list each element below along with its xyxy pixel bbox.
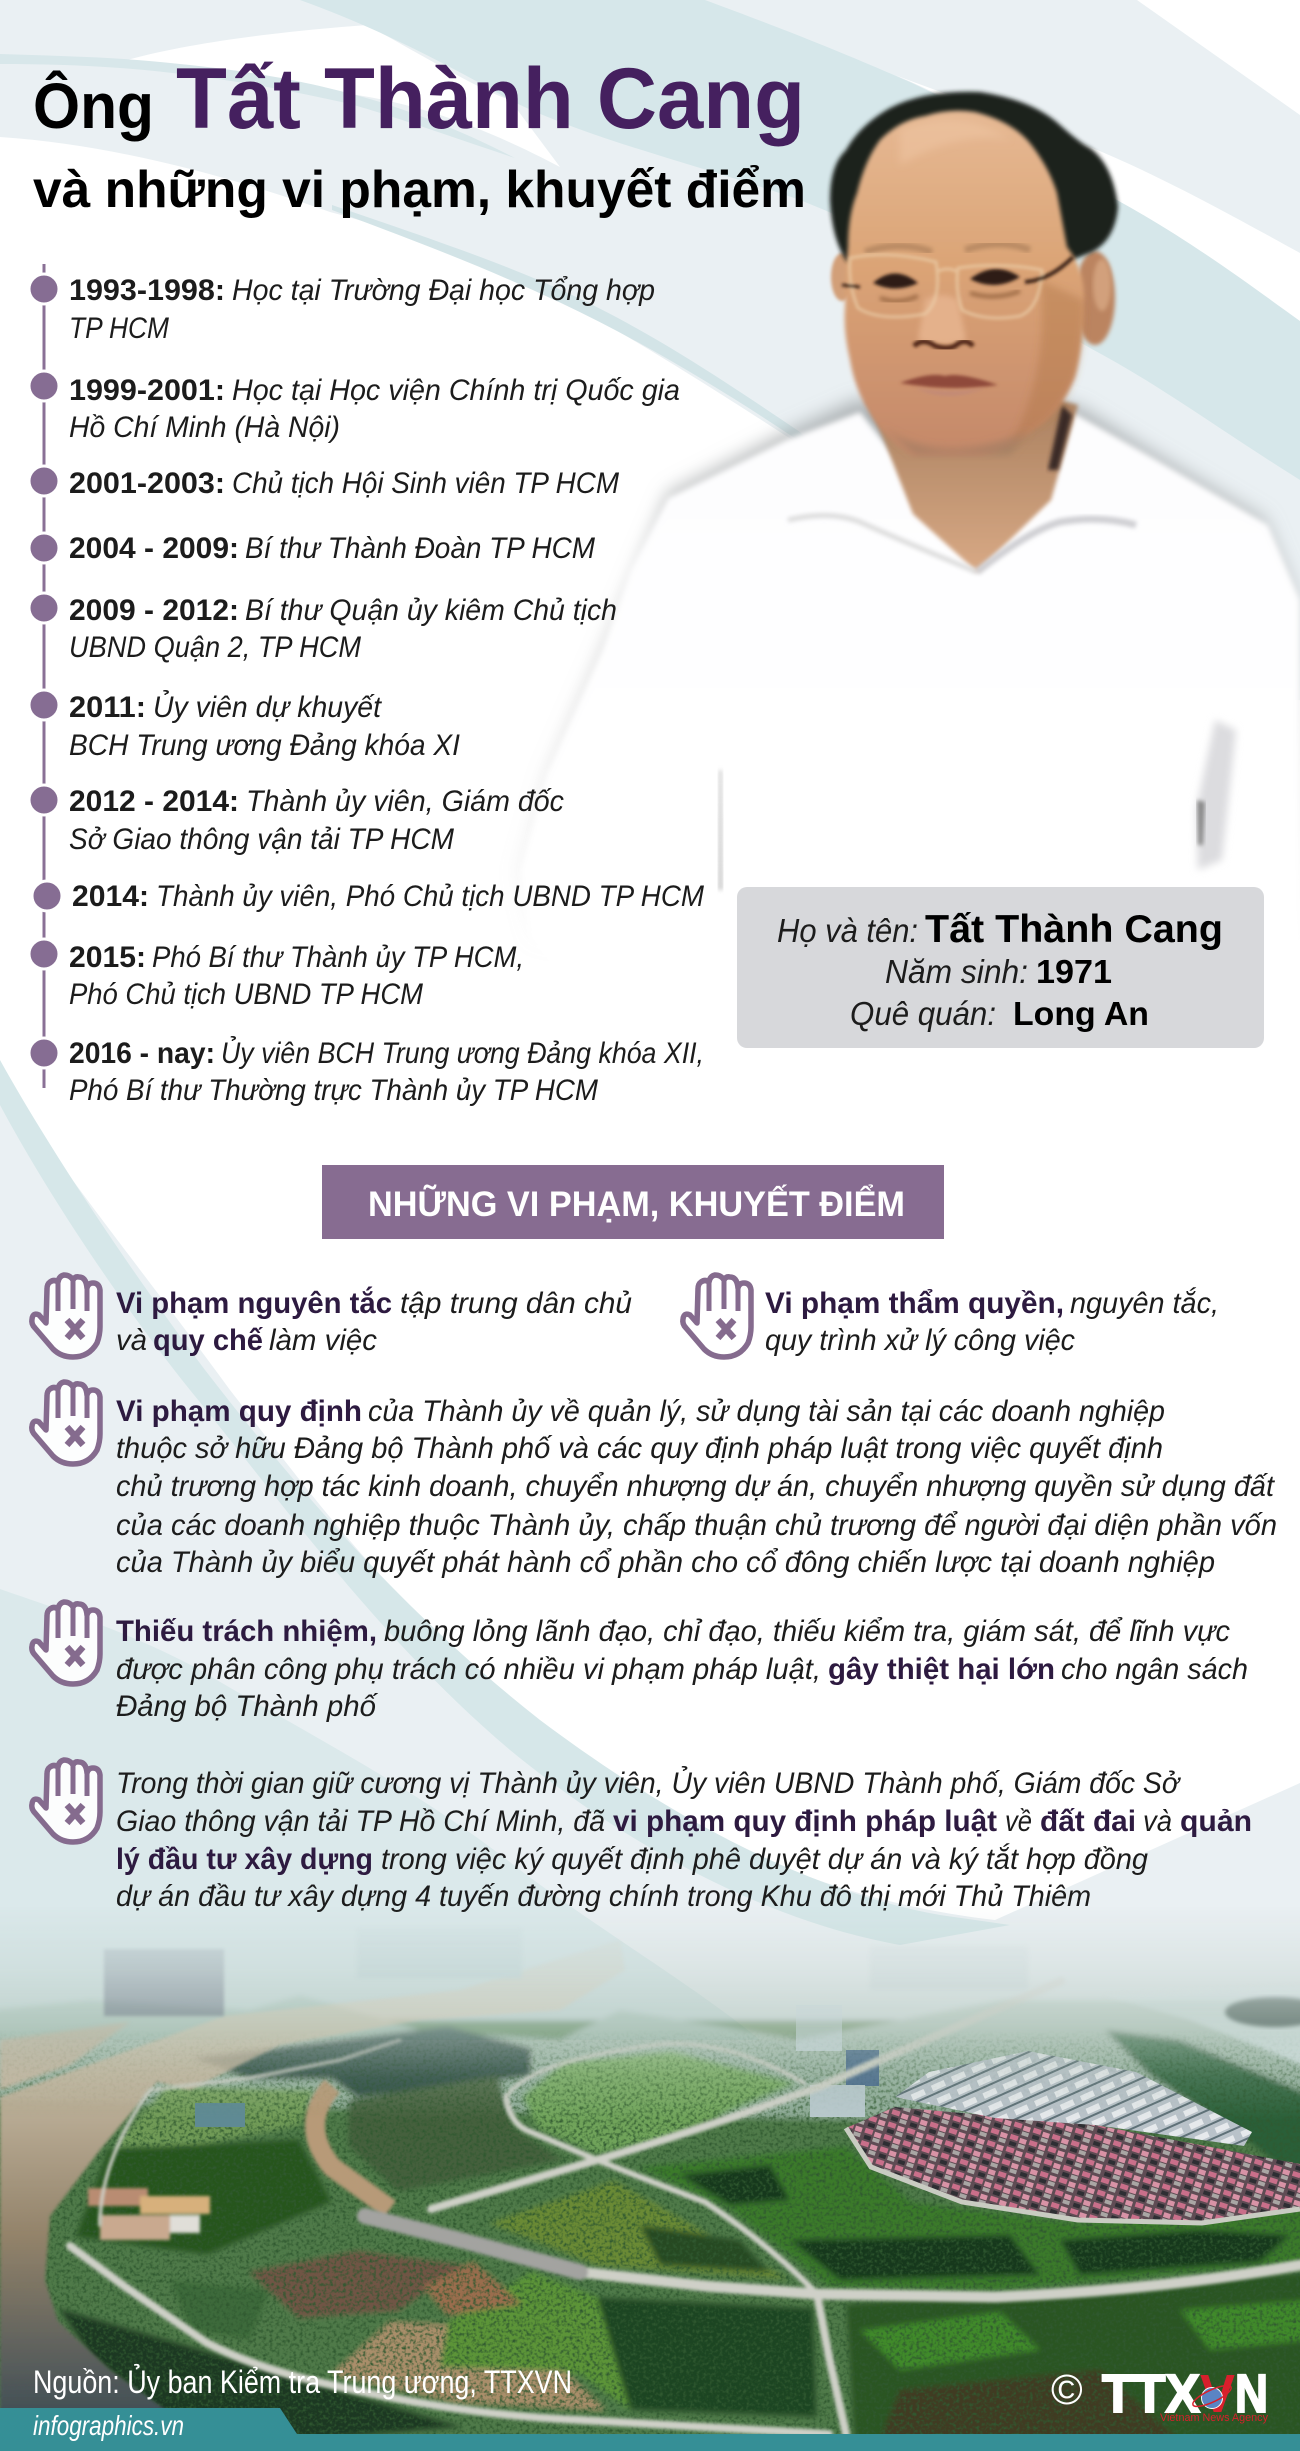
- entry 2016-nay: 2016 - nay:: [69, 1037, 215, 1070]
- apartment blocks: [895, 2051, 1252, 2146]
- violation: nguyên tắc: Vi phạm nguyên tắc: [116, 1286, 392, 1320]
- violation: quy định: Vi phạm quy định: [116, 1395, 362, 1428]
- panel: personal info box: Quê quán:: [850, 995, 996, 1032]
- section heading banner: NHỮNG VI PHẠM, KHUYẾT ĐIỂM: [368, 1184, 905, 1224]
- entry 2009-2012: 2009 - 2012:: [69, 594, 239, 627]
- entry 2016-nay: Phó Bí thư Thường trực Thành ủy TP HCM: [69, 1074, 598, 1107]
- violation: nguyên tắc: tập trung dân chủ: [400, 1287, 632, 1320]
- violation: thiếu trách nhiệm: được phân công phụ trách có nhiều vi phạm pháp luật,: [116, 1653, 821, 1686]
- green field bottom center: [440, 2272, 630, 2410]
- violation: thiếu trách nhiệm: gây thiệt hại lớn: [828, 1653, 1055, 1686]
- logo: TTXVN: [1051, 2364, 1268, 2424]
- central ring field: [522, 2051, 796, 2153]
- title: [33, 51, 806, 219]
- title: Tất Thành Cang: [176, 51, 805, 147]
- entry 2004-2009: [69, 532, 595, 565]
- violation: thiếu trách nhiệm: buông lỏng lãnh đạo, chỉ đạo, thiếu kiểm tra, giám sát, để lĩnh vực: [384, 1615, 1230, 1648]
- entry 2009-2012: [69, 594, 617, 664]
- collar folds and shirt shadows: [788, 515, 977, 572]
- violation: quy định: của các doanh nghiệp thuộc Thành ủy, chấp thuận chủ trương để người đại diện phần vốn: [116, 1509, 1277, 1542]
- violation: quy định: [32, 1382, 1277, 1579]
- shirt soft shadow: [516, 400, 1300, 960]
- timeline dots: [29, 274, 62, 1068]
- mouth: [900, 375, 998, 388]
- title: Ông: [33, 69, 154, 142]
- entry 2004-2009: Bí thư Thành Đoàn TP HCM: [245, 532, 595, 565]
- villa district: [846, 2107, 1300, 2223]
- forest upper-right: [1106, 2029, 1300, 2164]
- violation: thiếu trách nhiệm: [32, 1602, 1248, 1723]
- entry 2015: 2015:: [69, 941, 146, 974]
- violation: đất đai và đầu tư xây dựng: lý đầu tư xây dựng: [116, 1843, 373, 1876]
- riverside houses: [88, 2188, 210, 2240]
- violation: đất đai và đầu tư xây dựng: Trong thời gian giữ cương vị Thành ủy viên, Ủy viên UBND Thành phố, Giám đốc Sở: [116, 1765, 1182, 1800]
- entry 2012-2014: Sở Giao thông vận tải TP HCM: [69, 823, 454, 856]
- entry 2015: [69, 941, 524, 1011]
- center bottom forest: [597, 2297, 817, 2417]
- violation: đất đai và đầu tư xây dựng: vi phạm quy định pháp luật: [613, 1805, 997, 1838]
- triangular field: [489, 2181, 788, 2279]
- logo: TTXVN: Vietnam News Agency: [1160, 2412, 1268, 2424]
- icon: globe: [1190, 2382, 1234, 2410]
- face shading: [1010, 280, 1084, 445]
- brows: [865, 244, 1030, 252]
- entry 2001-2003: Chủ tịch Hội Sinh viên TP HCM: [232, 467, 619, 500]
- left river: [0, 1963, 622, 2408]
- violation: đất đai và đầu tư xây dựng: trong việc ký quyết định phê duyệt dự án và ký tắt hợp đồng: [381, 1843, 1148, 1876]
- entry 2011: Ủy viên dự khuyết: [153, 689, 383, 724]
- glasses: [842, 255, 1073, 318]
- logo: TTXVN: TTX: [1102, 2364, 1200, 2424]
- violation: đất đai và đầu tư xây dựng: [32, 1760, 1252, 1913]
- entry 2015: Phó Chủ tịch UBND TP HCM: [69, 978, 423, 1011]
- violation: thiếu trách nhiệm: Đảng bộ Thành phố: [116, 1690, 378, 1723]
- violation: thẩm quyền: [683, 1275, 1219, 1357]
- roads: [70, 1981, 1300, 2434]
- right river: [1155, 2005, 1300, 2066]
- mid forest: [348, 2076, 564, 2192]
- photo: aerial view of Thủ Thiêm new urban area: [0, 1890, 1300, 2450]
- violation: nguyên tắc: [32, 1275, 632, 1357]
- panel: personal info box: Long An: [1013, 995, 1149, 1032]
- violation: thẩm quyền: quy trình xử lý công việc: [765, 1324, 1075, 1357]
- icon: hand with cross: [32, 1602, 100, 1684]
- footer band: infographics.vn: [33, 2410, 184, 2441]
- violation: đất đai và đầu tư xây dựng: và: [1143, 1805, 1172, 1838]
- dark coastal park: [58, 2308, 464, 2440]
- entry 1993-1998: Học tại Trường Đại học Tổng hợp: [232, 274, 655, 307]
- entry 2001-2003: [69, 467, 619, 500]
- panel: personal info box: [737, 887, 1264, 1048]
- violation: đất đai và đầu tư xây dựng: đất đai: [1040, 1805, 1136, 1838]
- photo: Tất Thành Cang portrait: [516, 92, 1300, 1000]
- left trees: [75, 2139, 332, 2255]
- panel: personal info box: Năm sinh:: [885, 953, 1028, 990]
- violation: đất đai và đầu tư xây dựng: Giao thông vận tải TP Hồ Chí Minh, đã: [116, 1805, 605, 1838]
- riverbank buildings: [0, 2022, 130, 2090]
- entry 2015: Phó Bí thư Thành ủy TP HCM,: [152, 941, 524, 974]
- entry 1993-1998: 1993-1998:: [69, 274, 225, 307]
- brown road: [315, 2086, 390, 2209]
- entry 2014: 2014:: [72, 880, 149, 913]
- entry 1999-2001: Học tại Học viện Chính trị Quốc gia: [232, 374, 680, 407]
- timeline: [29, 264, 704, 1107]
- title: và những vi phạm, khuyết điểm: [33, 161, 806, 219]
- entry 2011: [69, 689, 460, 762]
- towers: [846, 2050, 879, 2086]
- footer band: [0, 2408, 1300, 2451]
- violation: đất đai và đầu tư xây dựng: quản: [1180, 1805, 1252, 1838]
- entry 1999-2001: Hồ Chí Minh (Hà Nội): [69, 411, 340, 444]
- foliage texture: [0, 2030, 1300, 2434]
- violation: thẩm quyền: Vi phạm thẩm quyền,: [765, 1287, 1064, 1320]
- entry 2014: Thành ủy viên, Phó Chủ tịch UBND TP HCM: [156, 880, 704, 913]
- land layers: [0, 1940, 1300, 2434]
- entry 1993-1998: [69, 274, 655, 345]
- logo: TTXVN: N: [1235, 2364, 1268, 2424]
- violation: quy định: của Thành ủy về quản lý, sử dụng tài sản tại các doanh nghiệp: [368, 1395, 1165, 1428]
- logo: TTXVN: V: [1200, 2364, 1235, 2424]
- violation: nguyên tắc: làm việc: [269, 1324, 377, 1357]
- violation: thiếu trách nhiệm: cho ngân sách: [1061, 1653, 1248, 1686]
- panel: personal info box: Tất Thành Cang: [925, 908, 1223, 951]
- violation: quy định: của Thành ủy biểu quyết phát hành cổ phần cho cổ đông chiến lược tại doanh nghiệp: [116, 1546, 1215, 1579]
- violation: quy định: chủ trương hợp tác kinh doanh, chuyển nhượng dự án, chuyển nhượng quyền sử dụng đất: [116, 1470, 1276, 1503]
- violation: quy định: thuộc sở hữu Đảng bộ Thành phố và các quy định pháp luật trong việc quyết định: [116, 1432, 1163, 1465]
- face: [845, 111, 1084, 456]
- neck: [866, 395, 1078, 572]
- panel: personal info box: 1971: [1036, 953, 1112, 990]
- entry 2012-2014: 2012 - 2014:: [69, 785, 239, 818]
- hair: [830, 92, 1118, 262]
- icon: hand with cross: [683, 1275, 751, 1357]
- panel: personal info box: Họ và tên:: [777, 912, 918, 949]
- entry 1999-2001: [69, 374, 680, 444]
- violation: thiếu trách nhiệm: Thiếu trách nhiệm,: [116, 1615, 377, 1648]
- entry 2004-2009: 2004 - 2009:: [69, 532, 239, 565]
- bottom right forest: [846, 2272, 1300, 2440]
- dark forest upper-left: [191, 2026, 531, 2097]
- right green area: [638, 2146, 1300, 2290]
- ears: [1075, 251, 1115, 345]
- entry 2016-nay: Ủy viên BCH Trung ương Đảng khóa XII,: [221, 1035, 704, 1070]
- section heading banner: [322, 1165, 944, 1239]
- construction pits: [249, 2251, 464, 2318]
- entry 2012-2014: [69, 785, 564, 856]
- entry 2012-2014: Thành ủy viên, Giám đốc: [246, 785, 564, 818]
- entry 1993-1998: TP HCM: [69, 312, 169, 345]
- icon: hand with cross: [32, 1382, 100, 1464]
- violation: nguyên tắc: quy chế: [153, 1324, 263, 1357]
- shirt: [520, 412, 1300, 1000]
- eyes: [873, 269, 1020, 288]
- entry 1999-2001: 1999-2001:: [69, 374, 225, 407]
- entry 2009-2012: UBND Quận 2, TP HCM: [69, 631, 361, 664]
- entry 2011: 2011:: [69, 691, 146, 724]
- icon: hand with cross: [32, 1275, 100, 1357]
- upper hazy city: [0, 1928, 1300, 2024]
- violation: đất đai và đầu tư xây dựng: dự án đầu tư xây dựng 4 tuyến đường chính trong Khu đô thị mới Thủ Thiêm: [116, 1880, 1091, 1913]
- entry 2016-nay: [69, 1035, 704, 1107]
- violation: nguyên tắc: và: [116, 1324, 147, 1357]
- violation: thẩm quyền: nguyên tắc,: [1070, 1287, 1219, 1320]
- violation: đất đai và đầu tư xây dựng: về: [1005, 1805, 1032, 1838]
- left green field: [116, 2086, 315, 2146]
- source line: Nguồn: Ủy ban Kiểm tra Trung ương, TTXVN: [33, 2364, 572, 2400]
- entry 2011: BCH Trung ương Đảng khóa XI: [69, 729, 460, 762]
- logo: TTXVN: ©: [1051, 2366, 1083, 2414]
- nose: [918, 295, 966, 345]
- tan construction ground: [332, 2322, 605, 2410]
- icon: hand with cross: [32, 1760, 100, 1842]
- entry 2001-2003: 2001-2003:: [69, 467, 225, 500]
- entry 2009-2012: Bí thư Quận ủy kiêm Chủ tịch: [245, 594, 617, 627]
